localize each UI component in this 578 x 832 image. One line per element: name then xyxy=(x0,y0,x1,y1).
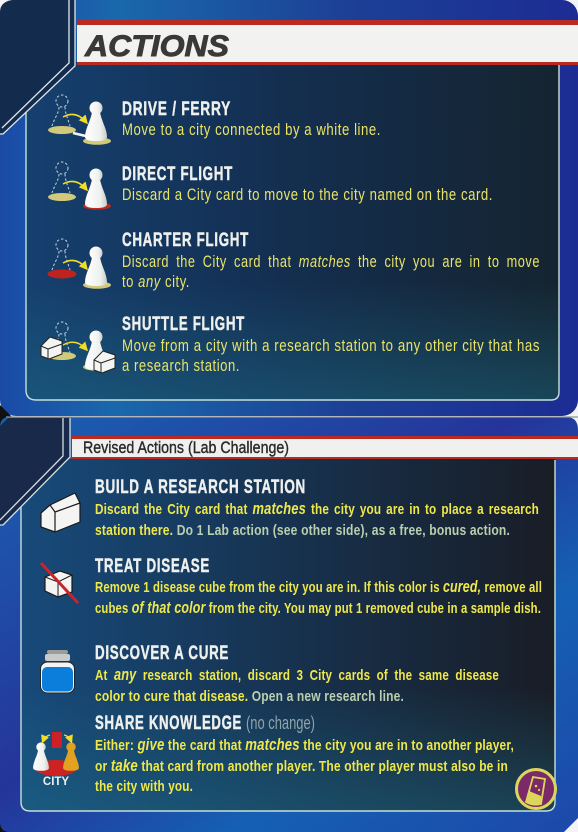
text: build a research station: station there. Do 1 Lab action (see other side), as a free, bonus action. xyxy=(95,522,510,539)
text: drive ferry: DRIVE / FERRY xyxy=(122,99,231,120)
text: treat disease: Remove 1 disease cube from the city you are in. If this color is cured, remove all xyxy=(95,578,542,596)
text: charter flight: CHARTER FLIGHT xyxy=(122,230,249,251)
icon: research station xyxy=(41,493,80,532)
text: direct flight: Discard a City card to move to the city named on the card. xyxy=(122,186,493,204)
text: share knowledge: (no change) xyxy=(246,713,315,733)
text: shuttle flight: SHUTTLE FLIGHT xyxy=(122,314,245,335)
text: discover a cure xyxy=(95,643,499,705)
text: share knowledge: the city with you. xyxy=(95,778,193,795)
text: discover a cure: color to cure that disease. Open a new research line. xyxy=(95,688,404,705)
text: drive ferry xyxy=(122,99,381,139)
text: direct flight: DIRECT FLIGHT xyxy=(122,164,233,185)
icon: treat disease cube xyxy=(41,563,78,603)
text: treat disease xyxy=(95,556,542,617)
panel: revised actions card xyxy=(0,405,578,832)
banner: revised actions xyxy=(72,436,578,459)
text: treat disease: TREAT DISEASE xyxy=(95,556,210,577)
icon: shuttle flight xyxy=(41,322,115,373)
text: shuttle flight: a research station. xyxy=(122,357,240,375)
heading: revised actions: Revised Actions (Lab Challenge) xyxy=(83,439,289,457)
corner tab xyxy=(0,0,75,134)
text: direct flight xyxy=(122,164,493,204)
heading: actions: ACTIONS xyxy=(84,30,229,63)
icon: share knowledge: CITY xyxy=(43,776,69,788)
text: share knowledge: Either: give the card that matches the city you are in to another player, xyxy=(95,736,514,754)
text: share knowledge xyxy=(95,713,514,795)
text: charter flight xyxy=(122,230,540,291)
icon: lab badge xyxy=(516,770,556,808)
inner dark panel xyxy=(26,62,559,400)
icon: charter flight xyxy=(48,239,111,289)
banner: actions xyxy=(77,20,578,65)
icon: drive ferry xyxy=(48,95,111,145)
corner tab xyxy=(0,418,70,525)
text: drive ferry: Move to a city connected by a white line. xyxy=(122,121,381,139)
panel: actions card xyxy=(0,0,578,416)
icon: direct flight xyxy=(48,162,111,210)
text: charter flight: to any city. xyxy=(122,273,190,291)
text: build a research station: BUILD A RESEARCH STATION xyxy=(95,477,306,498)
icon: sample jar xyxy=(40,650,74,693)
text: shuttle flight xyxy=(122,314,540,375)
icon: share knowledge xyxy=(33,732,79,788)
text: share knowledge: SHARE KNOWLEDGE xyxy=(95,713,242,734)
text: discover a cure: DISCOVER A CURE xyxy=(95,643,229,664)
text: build a research station xyxy=(95,477,539,539)
inner dark panel xyxy=(21,459,555,811)
